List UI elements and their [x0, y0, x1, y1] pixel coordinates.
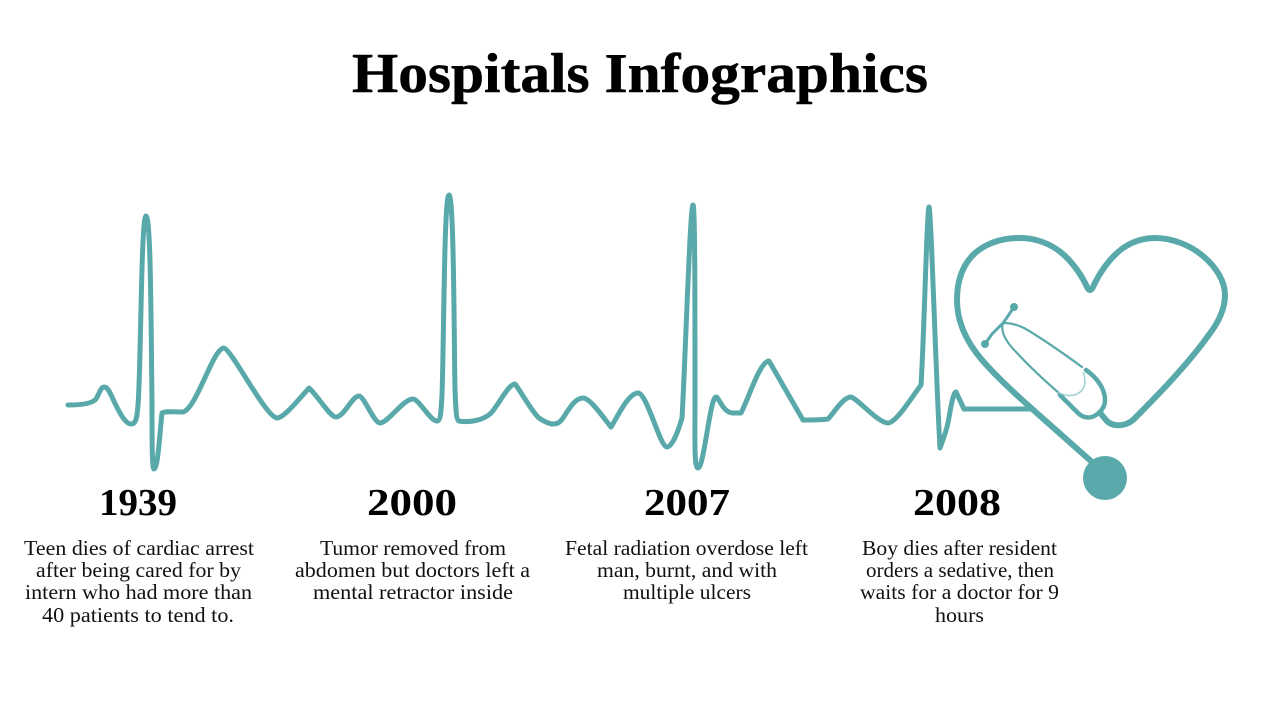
- binaural loop: thin section: [1002, 323, 1082, 394]
- ECG heartbeat line: [68, 195, 1030, 469]
- timeline entry: 1939: [24, 482, 254, 627]
- timeline entry: 2000: mental retractor inside: [313, 580, 513, 604]
- timeline entry: 2000: 2000: [367, 482, 457, 524]
- timeline entry: 2008: Boy dies after resident: [862, 536, 1057, 560]
- timeline entry: 2000: abdomen but doctors left a: [295, 558, 531, 582]
- inner highlight: [1058, 372, 1085, 395]
- timeline entry: 1939: intern who had more than: [25, 580, 253, 604]
- heart tubing: [957, 238, 1225, 462]
- timeline entry: 2007: man, burnt, and with: [597, 558, 778, 582]
- timeline entry: 2000: [295, 482, 531, 604]
- timeline entry: 2007: [565, 482, 808, 604]
- ear tips: [985, 307, 1014, 344]
- timeline entry: 2008: [860, 482, 1059, 627]
- timeline entry: 1939: after being cared for by: [36, 558, 242, 582]
- timeline entry: 2000: Tumor removed from: [320, 536, 506, 560]
- stethoscope heart icon: [957, 238, 1225, 500]
- timeline entry: 2007: Fetal radiation overdose left: [565, 536, 808, 560]
- timeline entry: 2007: multiple ulcers: [623, 580, 751, 604]
- timeline entry: 2008: orders a sedative, then: [866, 558, 1054, 582]
- timeline entry: 1939: 1939: [99, 482, 177, 524]
- timeline entry: 2007: 2007: [644, 482, 730, 524]
- title: Hospitals Infographics: [352, 43, 928, 105]
- chestpiece: [1083, 456, 1127, 500]
- timeline entry: 1939: Teen dies of cardiac arrest: [24, 536, 254, 560]
- timeline entry: 2008: waits for a doctor for 9: [860, 580, 1059, 604]
- timeline entry: 2008: hours: [935, 603, 984, 627]
- timeline entry: 1939: 40 patients to tend to.: [42, 603, 234, 627]
- binaural loop: thick section: [1060, 370, 1105, 417]
- timeline entry: 2008: 2008: [913, 482, 1001, 524]
